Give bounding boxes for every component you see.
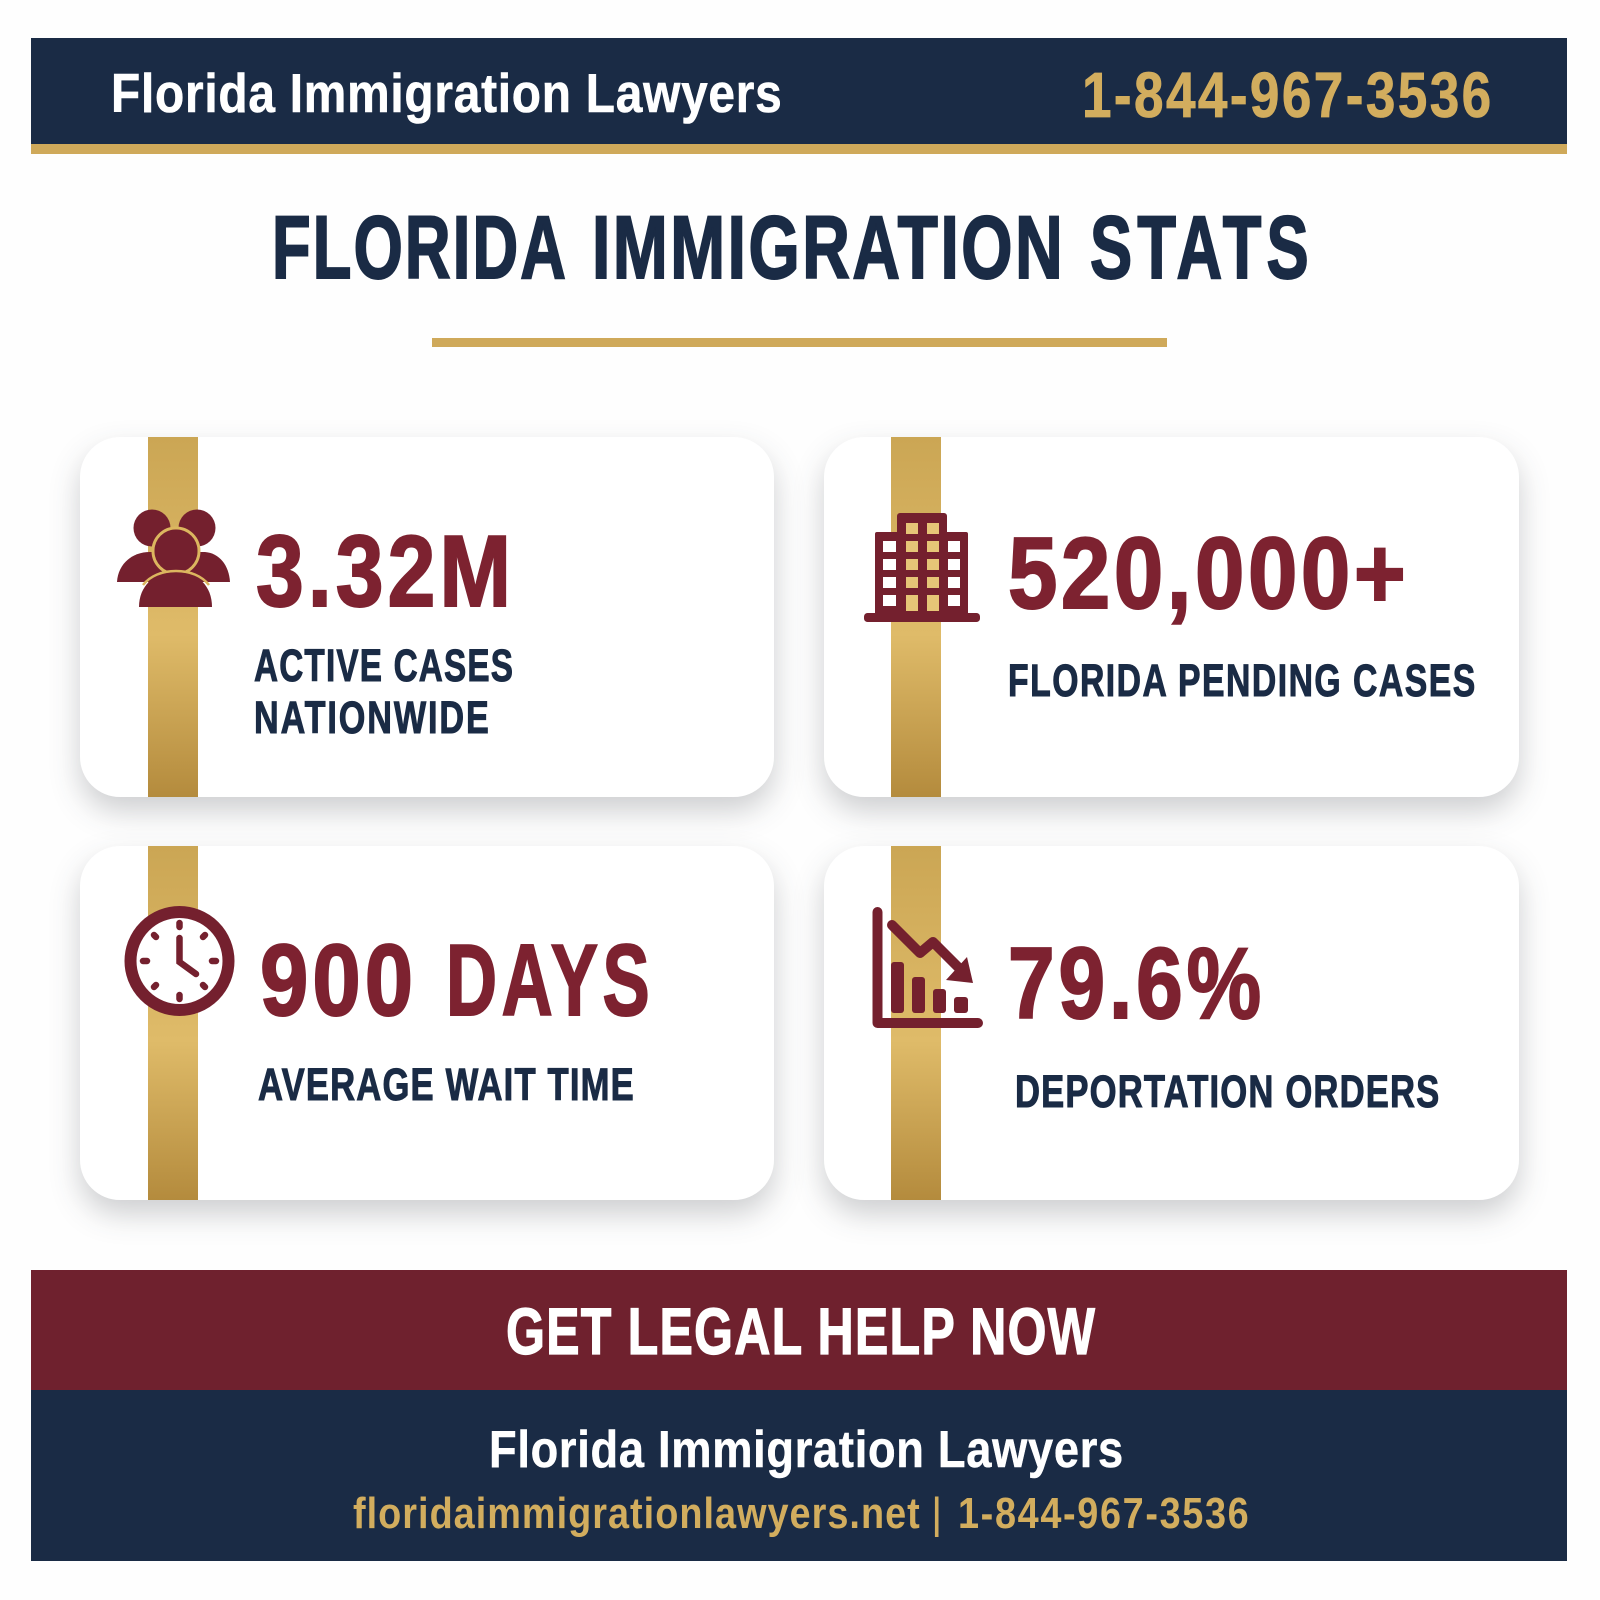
header band <box>31 38 1567 154</box>
header phone number: 1-844-967-3536 <box>1082 60 1491 131</box>
title: FLORIDA <box>272 198 566 298</box>
stat value: 3.32M <box>256 514 511 628</box>
header firm name: Florida Immigration Lawyers <box>111 62 782 124</box>
footer band <box>31 1390 1567 1561</box>
panel: deportation orders <box>824 846 1519 1200</box>
stat value: 900 <box>260 924 413 1036</box>
stat label: DEPORTATION ORDERS <box>1015 1067 1439 1117</box>
title underline <box>432 338 1167 347</box>
stat label <box>254 641 513 743</box>
call to action heading: GET LEGAL HELP NOW <box>506 1295 1096 1369</box>
footer website and phone: 1-844-967-3536 <box>958 1488 1249 1538</box>
stat label: AVERAGE WAIT TIME <box>258 1060 634 1110</box>
icon: people group <box>117 510 230 607</box>
panel: average wait time <box>80 846 774 1200</box>
panel: Florida pending cases <box>824 437 1519 797</box>
stat value: 79.6% <box>1008 927 1261 1040</box>
footer website and phone: floridaimmigrationlawyers.net <box>353 1488 920 1538</box>
title <box>272 197 1309 298</box>
call to action band <box>31 1270 1567 1390</box>
footer website and phone: | <box>931 1489 942 1538</box>
footer firm name: Florida Immigration Lawyers <box>489 1421 1123 1479</box>
stat value: DAYS <box>446 925 650 1037</box>
icon: clock <box>130 912 228 1010</box>
icon: office building <box>864 513 980 622</box>
footer website and phone <box>353 1488 1249 1538</box>
title: STATS <box>1090 198 1309 298</box>
stat value <box>260 924 650 1037</box>
stat value: 520,000+ <box>1008 518 1406 630</box>
stat label: ACTIVE CASES <box>254 641 513 691</box>
stat label: NATIONWIDE <box>254 694 489 743</box>
icon: declining bar chart <box>878 912 978 1023</box>
panel: active cases <box>80 437 774 797</box>
title: IMMIGRATION <box>592 197 1063 297</box>
stat label: FLORIDA PENDING CASES <box>1008 656 1475 706</box>
